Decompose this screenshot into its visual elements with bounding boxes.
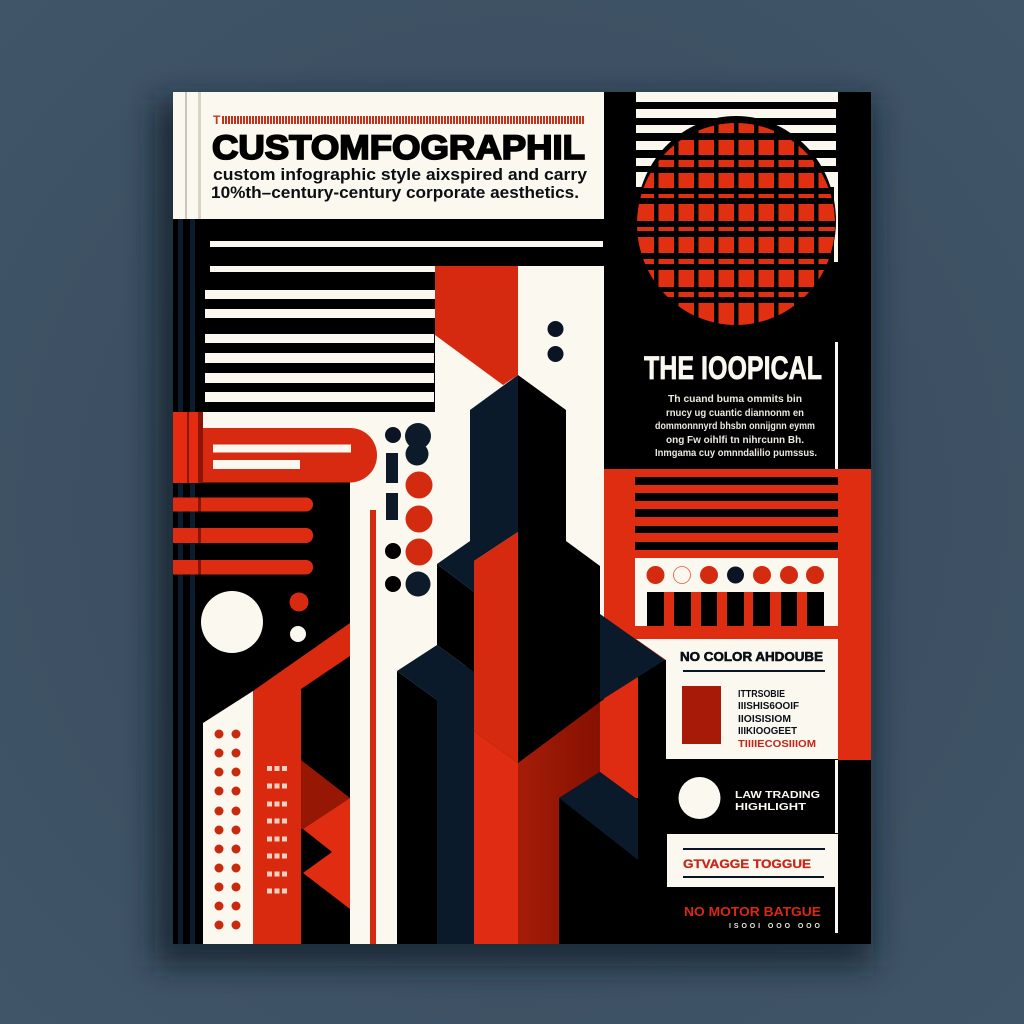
body text: ong Fw oihlfi tn nihrcunn Bh. — [666, 435, 804, 446]
subtitle: 10%th–century-century corporate aesthetics. — [211, 183, 579, 202]
panel: title header — [173, 92, 604, 219]
subtitle: custom infographic style aixspired and carry — [213, 165, 588, 184]
legend list: IIISHIS6OOIF — [738, 701, 799, 712]
eyebrow rule: T — [213, 113, 221, 127]
right red side extension — [838, 626, 871, 760]
grid circle — [630, 116, 842, 330]
red angular shape — [435, 266, 518, 385]
thin red vertical line — [370, 510, 376, 944]
black stripes — [635, 477, 838, 550]
icon: dots and bars column — [385, 423, 432, 596]
vertical white rule — [835, 342, 838, 469]
panel: central tower — [397, 375, 871, 944]
panel: red block — [604, 469, 871, 760]
panel: red label card — [667, 834, 838, 887]
poster — [173, 92, 871, 944]
body text: Th cuand buma ommits bin — [668, 394, 802, 405]
panel: left edge stripes — [178, 219, 195, 944]
icon: two dots — [548, 321, 564, 362]
panel: legend card — [636, 639, 838, 759]
legend list: IIOISISIOM — [738, 714, 791, 725]
legend list: ITTRSOBIE — [738, 689, 785, 700]
panel: circles and bars — [635, 558, 838, 626]
top stripes — [636, 92, 838, 262]
panel: red pill bars — [173, 412, 377, 574]
footer text — [684, 887, 838, 933]
body text: rnucy ug cuantic diannonm en — [666, 408, 804, 419]
heading: THE IOOPICAL — [644, 350, 822, 386]
long cream rule — [210, 241, 603, 247]
body text: Inmgama cuy omnndalilio pumssus. — [655, 448, 817, 459]
panel: red label card: GTVAGGE TOGGUE — [683, 857, 811, 871]
panel: dotted cream column — [203, 691, 253, 944]
swatch — [682, 686, 721, 744]
red triangles — [301, 760, 350, 909]
legend list: IIIKIOOGEET — [738, 726, 797, 737]
icon: large and small circles — [201, 591, 308, 653]
panel: red diagonal band — [253, 623, 350, 944]
panel: highlight row — [678, 760, 838, 833]
stripes block — [205, 266, 435, 402]
card heading: NO COLOR AHDOUBE — [680, 649, 823, 664]
footer text: ISOOI OOO OOO — [729, 923, 821, 930]
panel: highlight row: LAW TRADING — [735, 790, 820, 801]
main title: CUSTOMFOGRAPHIL — [212, 129, 585, 167]
legend list: TIIIIECOSIIIOM — [738, 739, 816, 750]
panel: highlight row: HIGHLIGHT — [735, 802, 806, 813]
panel: cream background blocks — [203, 266, 604, 944]
footer text: NO MOTOR BATGUE — [684, 904, 821, 919]
body text: dommonnnyrd bhsbn onnijgnn eymm — [655, 421, 815, 432]
panel: upper right black with grid circle — [636, 92, 838, 469]
